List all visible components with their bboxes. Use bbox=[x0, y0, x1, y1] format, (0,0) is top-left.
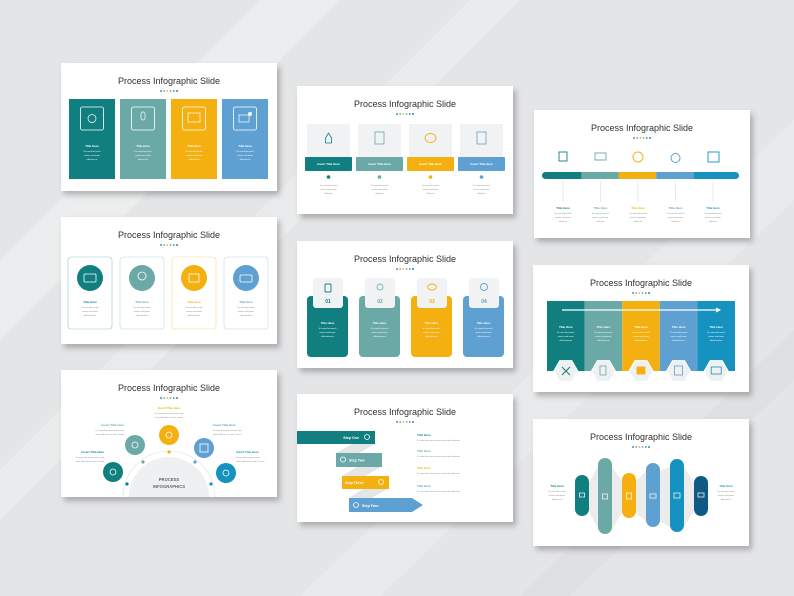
slide 4: outlined cards with circles bbox=[61, 217, 277, 344]
column texts: easier and more bbox=[595, 335, 612, 338]
column texts: Title Here bbox=[597, 325, 611, 329]
card 1: Title Here bbox=[85, 144, 99, 148]
card 01: It's now that much bbox=[319, 327, 337, 330]
item 3: Title Here bbox=[631, 206, 645, 210]
right text: It's now that much bbox=[717, 490, 736, 493]
card 02: effectiveness bbox=[373, 335, 387, 338]
card 1: effective to bbox=[87, 158, 98, 161]
card 1 bbox=[69, 99, 115, 179]
card 1: It's now that much bbox=[81, 306, 100, 309]
left text: It's now that much bbox=[548, 490, 567, 493]
step 2: more effective to start, Lorem bbox=[96, 433, 124, 436]
card 1 bbox=[68, 257, 112, 329]
column texts: effectiveness bbox=[635, 339, 648, 342]
slide 3: timeline bar bbox=[534, 110, 750, 238]
step 2: effective bbox=[375, 192, 384, 195]
right texts: Title Here bbox=[417, 466, 431, 470]
step four: Step Four bbox=[362, 504, 379, 508]
slide 2: tiles with title bars bbox=[297, 86, 513, 214]
step three bbox=[342, 476, 389, 489]
step 2: easier and more bbox=[372, 188, 388, 191]
step 3 bbox=[155, 406, 184, 454]
column texts: Title Here bbox=[559, 325, 573, 329]
card 2: It's now that much bbox=[134, 150, 153, 153]
step 2: It's now that much bbox=[371, 184, 389, 187]
right texts: It's now that much easier and more effective bbox=[417, 490, 460, 493]
step 4: easier and more bbox=[474, 188, 490, 191]
card 3: easier and more bbox=[186, 310, 203, 313]
slide 7: semicircle process bbox=[61, 370, 277, 497]
column texts: effectiveness bbox=[710, 339, 723, 342]
step 3: It's now that much easier and bbox=[155, 412, 184, 415]
step 3: It's now that much bbox=[422, 184, 440, 187]
title: Process Infographic Slide bbox=[118, 76, 220, 86]
card 3: It's now that much bbox=[185, 150, 204, 153]
item 2: easier and more bbox=[593, 216, 609, 219]
step 5: more effective to start, Lorem bbox=[236, 460, 265, 463]
step 1: Insert Title Here bbox=[81, 450, 104, 454]
card 1: It's now that much bbox=[83, 150, 102, 153]
column texts: easier and more bbox=[708, 335, 725, 338]
item 5: easier and more bbox=[705, 216, 722, 219]
step 2 bbox=[356, 124, 403, 195]
card 02 bbox=[359, 278, 400, 357]
card 2: easier and more bbox=[134, 310, 151, 313]
item 2: Title Here bbox=[594, 206, 608, 210]
item 3 bbox=[629, 152, 648, 223]
column texts: It's now that much bbox=[557, 331, 575, 334]
card 03 bbox=[411, 278, 452, 357]
step one bbox=[297, 431, 375, 444]
step 2: Insert Title Here bbox=[368, 162, 391, 166]
title: Process Infographic Slide bbox=[118, 230, 220, 240]
card 03: easier and more bbox=[424, 331, 440, 334]
step two bbox=[336, 453, 382, 467]
step 4: Insert Title Here bbox=[470, 162, 493, 166]
item 1: easier and more bbox=[555, 216, 572, 219]
step two: Step Two bbox=[349, 458, 366, 462]
step 4: It's now that much easier and bbox=[213, 429, 242, 432]
card 3: easier and more bbox=[186, 154, 203, 157]
item 2 bbox=[592, 153, 610, 223]
slide 1: four colored cards bbox=[61, 63, 277, 191]
card 3 bbox=[172, 257, 216, 329]
left text: easier and more bbox=[549, 494, 566, 497]
item 4: effective bbox=[671, 220, 680, 223]
pill 2 bbox=[598, 458, 612, 534]
card 2 bbox=[120, 99, 166, 179]
card 1: effectiveness bbox=[84, 314, 97, 317]
item 1: effective bbox=[559, 220, 568, 223]
right texts: It's now that much easier and more effective bbox=[417, 439, 460, 442]
center half circle: PROCESS bbox=[159, 477, 179, 482]
step 3: effective bbox=[426, 192, 435, 195]
item 4: It's now that much bbox=[667, 212, 685, 215]
item 5: Title Here bbox=[706, 206, 720, 210]
card 3: effective to bbox=[189, 158, 200, 161]
step 1: It's now that much easier and bbox=[76, 456, 105, 459]
column texts: easier and more bbox=[671, 335, 687, 338]
card 4: Title Here bbox=[239, 300, 253, 304]
item 2: effective bbox=[596, 220, 605, 223]
step 1: easier and more bbox=[321, 188, 337, 191]
right texts: Title Here bbox=[417, 449, 431, 453]
step 2 bbox=[96, 423, 145, 464]
step 5 bbox=[209, 450, 265, 486]
pill 5 bbox=[670, 459, 684, 532]
title: Process Infographic Slide bbox=[354, 99, 456, 109]
step 4 bbox=[193, 423, 242, 464]
step 1: effective bbox=[324, 192, 333, 195]
card 02: easier and more bbox=[372, 331, 388, 334]
card 03: effectiveness bbox=[425, 335, 439, 338]
card 03: Title Here bbox=[425, 321, 439, 325]
card 4: effectiveness bbox=[240, 314, 253, 317]
card 3: It's now that much bbox=[185, 306, 204, 309]
right texts: Title Here bbox=[417, 433, 431, 437]
card 4: It's now that much bbox=[237, 306, 256, 309]
arrow bbox=[562, 308, 721, 312]
step 4: effective bbox=[477, 192, 486, 195]
column texts: effectiveness bbox=[672, 339, 686, 342]
left text: Title Here bbox=[550, 484, 564, 488]
step 3: more effective to start, Lorem bbox=[155, 416, 183, 419]
pill 6 bbox=[694, 476, 708, 516]
hexagon icons bbox=[554, 361, 728, 381]
title: Process Infographic Slide bbox=[591, 123, 693, 133]
step 1 bbox=[76, 450, 129, 486]
connectors bbox=[336, 444, 387, 498]
right text: easier and more bbox=[718, 494, 735, 497]
card 04: 04 bbox=[481, 299, 487, 305]
item 3: effective bbox=[634, 220, 643, 223]
card 4: easier and more bbox=[238, 310, 255, 313]
step 4: Insert Title Here bbox=[213, 423, 236, 427]
card 3: Title Here bbox=[187, 300, 201, 304]
card 1: easier and more bbox=[84, 154, 101, 157]
item 5: It's now that much bbox=[704, 212, 723, 215]
item 3: easier and more bbox=[630, 216, 647, 219]
column texts: Title Here bbox=[709, 325, 723, 329]
column texts: It's now that much bbox=[670, 331, 688, 334]
card 4: easier and more bbox=[237, 154, 254, 157]
left text bbox=[548, 484, 567, 501]
card 2 bbox=[120, 257, 164, 329]
step 1: It's now that much bbox=[320, 184, 338, 187]
step 2: Insert Title Here bbox=[101, 423, 124, 427]
title: Process Infographic Slide bbox=[354, 254, 456, 264]
arc bbox=[123, 451, 215, 497]
step 1: Insert Title Here bbox=[317, 162, 340, 166]
card 4 bbox=[222, 99, 268, 179]
column texts: easier and more bbox=[558, 335, 574, 338]
title: Process Infographic Slide bbox=[590, 432, 692, 442]
step 1 bbox=[305, 124, 352, 195]
card 4: effective to bbox=[240, 158, 251, 161]
item 4: Title Here bbox=[669, 206, 683, 210]
card 02: It's now that much bbox=[371, 327, 389, 330]
center half circle: INFOGRAPHICS bbox=[153, 484, 185, 489]
card 2: It's now that much bbox=[133, 306, 152, 309]
card 2: effective to bbox=[138, 158, 149, 161]
item 4 bbox=[667, 154, 685, 223]
step three: Step Three bbox=[345, 481, 364, 485]
step 1: more effective to start, Lorem bbox=[76, 460, 104, 463]
card 4 bbox=[224, 257, 268, 329]
card 01: Title Here bbox=[321, 321, 335, 325]
column texts: It's now that much bbox=[632, 331, 651, 334]
columns bbox=[547, 301, 735, 371]
card 3: effectiveness bbox=[188, 314, 201, 317]
card 04 bbox=[463, 278, 504, 357]
title: Process Infographic Slide bbox=[590, 278, 692, 288]
item 3: It's now that much bbox=[629, 212, 648, 215]
item 4: easier and more bbox=[668, 216, 684, 219]
card 3 bbox=[171, 99, 217, 179]
item 2: It's now that much bbox=[592, 212, 610, 215]
timeline bar bbox=[542, 172, 739, 179]
card 3: Title Here bbox=[187, 144, 201, 148]
pill 4 bbox=[646, 463, 660, 527]
step four bbox=[349, 498, 423, 512]
right text: Title Here bbox=[719, 484, 733, 488]
column texts: effectiveness bbox=[559, 339, 573, 342]
pill 1 bbox=[575, 475, 589, 516]
card 2: effectiveness bbox=[136, 314, 149, 317]
pill shadows bbox=[589, 466, 694, 529]
column texts: Title Here bbox=[672, 325, 686, 329]
right text: effective to bbox=[721, 498, 732, 501]
step 3 bbox=[407, 124, 454, 195]
step 2: It's now that much easier and bbox=[96, 429, 125, 432]
card 2: easier and more bbox=[135, 154, 152, 157]
card 01: effectiveness bbox=[321, 335, 335, 338]
step 4: more effective to start, Lorem bbox=[213, 433, 242, 436]
card 04: easier and more bbox=[476, 331, 492, 334]
card 4: Title Here bbox=[238, 144, 252, 148]
right texts: Title Here bbox=[417, 484, 431, 488]
card 04: It's now that much bbox=[475, 327, 493, 330]
slide 8: staircase steps bbox=[297, 394, 513, 522]
title: Process Infographic Slide bbox=[118, 383, 220, 393]
step 3: Insert Title Here bbox=[158, 406, 181, 410]
card 01: easier and more bbox=[320, 331, 336, 334]
slide 9: vertical pills bbox=[533, 419, 749, 546]
card 02: 02 bbox=[377, 299, 383, 305]
step 4: It's now that much bbox=[473, 184, 491, 187]
card 2: Title Here bbox=[135, 300, 149, 304]
slide 5: numbered cards bbox=[297, 241, 513, 368]
center half circle bbox=[129, 457, 209, 497]
card 01: 01 bbox=[325, 299, 331, 305]
card 04: effectiveness bbox=[477, 335, 491, 338]
card 1: Title Here bbox=[83, 300, 97, 304]
card 03: 03 bbox=[429, 299, 435, 305]
column texts bbox=[557, 325, 726, 342]
step 5: It's now that much easier bbox=[236, 456, 260, 459]
card 2: Title Here bbox=[136, 144, 150, 148]
column texts: easier and more bbox=[633, 335, 650, 338]
card 04: Title Here bbox=[477, 321, 491, 325]
card 01 bbox=[307, 278, 348, 357]
right texts bbox=[417, 433, 460, 493]
right texts: It's now that much easier and more effective bbox=[417, 455, 460, 458]
item 1: Title Here bbox=[556, 206, 570, 210]
step 3: easier and more bbox=[423, 188, 439, 191]
pill 3 bbox=[622, 473, 636, 518]
column texts: effectiveness bbox=[597, 339, 611, 342]
item 1 bbox=[554, 152, 573, 223]
item 5 bbox=[704, 152, 723, 223]
column texts: It's now that much bbox=[595, 331, 613, 334]
right texts: It's now that much easier and more effective bbox=[417, 472, 460, 475]
step 4 bbox=[458, 124, 505, 195]
item 5: effective bbox=[709, 220, 718, 223]
column texts: Title Here bbox=[634, 325, 648, 329]
right text bbox=[717, 484, 736, 501]
step 5: Insert Title Here bbox=[236, 450, 259, 454]
card 1: easier and more bbox=[82, 310, 99, 313]
card 03: It's now that much bbox=[423, 327, 441, 330]
title: Process Infographic Slide bbox=[354, 407, 456, 417]
step 3: Insert Title Here bbox=[419, 162, 442, 166]
item 1: It's now that much bbox=[554, 212, 573, 215]
step one: Step One bbox=[343, 436, 359, 440]
slide 6: colored columns with hexagons bbox=[533, 265, 749, 392]
column texts: It's now that much bbox=[707, 331, 726, 334]
card 02: Title Here bbox=[373, 321, 387, 325]
left text: effective to bbox=[552, 498, 563, 501]
card 4: It's now that much bbox=[236, 150, 255, 153]
